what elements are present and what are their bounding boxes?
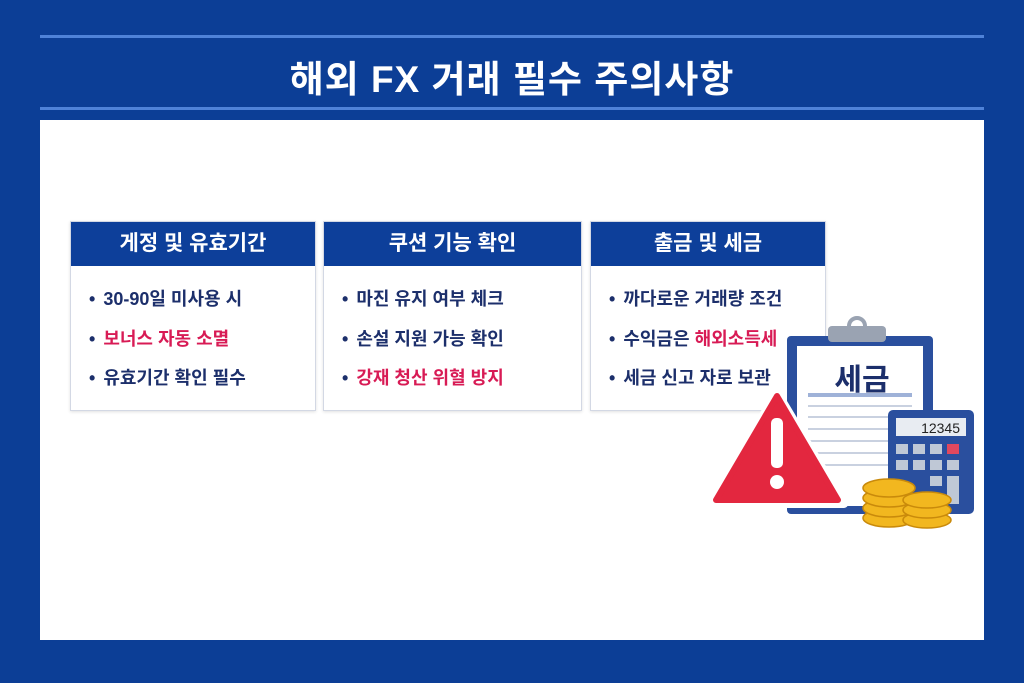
panel: account <box>70 221 316 411</box>
title: 해외 FX 거래 필수 주의사항 <box>290 59 734 100</box>
heading <box>324 222 581 266</box>
list: 30-90일 미사용 시 <box>103 289 242 309</box>
icon: calculator: 12345 <box>921 420 960 436</box>
panel: main white area <box>40 120 984 640</box>
icon: calculator <box>888 410 974 514</box>
icon: warning triangle <box>710 392 844 504</box>
icon: coins <box>863 479 951 528</box>
list: 보너스 자동 소멸 <box>103 328 229 348</box>
heading <box>71 222 315 266</box>
list: 까다로운 거래량 조건 <box>623 289 782 309</box>
icon: clipboard: 세금 <box>834 364 890 397</box>
heading <box>591 222 825 266</box>
list: 손설 지원 가능 확인 <box>356 328 504 348</box>
heading: 출금 및 세금 <box>654 232 762 255</box>
list: 수익금은 해외소득세 <box>623 328 777 348</box>
panel: withdrawal <box>590 221 826 411</box>
list: 강재 청산 위혈 방지 <box>356 368 504 388</box>
list <box>342 289 504 388</box>
icon: clipboard <box>787 318 933 514</box>
list <box>610 289 782 388</box>
list: 세금 신고 자로 보관 <box>623 368 771 388</box>
heading: 쿠션 기능 확인 <box>389 232 516 255</box>
list: 유효기간 확인 필수 <box>103 368 246 388</box>
list: 마진 유지 여부 체크 <box>356 289 504 309</box>
list <box>90 289 246 388</box>
panel: cushion <box>323 221 582 411</box>
heading: 게정 및 유효기간 <box>120 232 266 255</box>
